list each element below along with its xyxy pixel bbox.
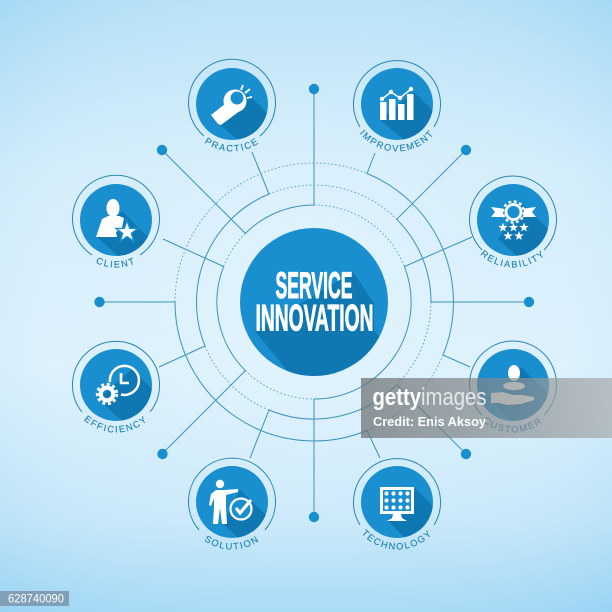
label: CLIENT bbox=[96, 258, 133, 268]
badge: customer bbox=[469, 340, 557, 433]
watermark logo: gettyimages bbox=[372, 384, 486, 411]
label: CUSTOMER bbox=[484, 418, 542, 433]
badge: practice bbox=[188, 58, 276, 152]
label: RELIABILITY bbox=[480, 250, 543, 268]
watermark banner bbox=[361, 378, 612, 438]
badge: solution bbox=[188, 458, 276, 550]
title: INNOVATION bbox=[256, 298, 374, 338]
badge: client bbox=[72, 174, 160, 268]
label: PRACTICE bbox=[204, 138, 258, 152]
icon: gear, ribbon and stars bbox=[491, 202, 536, 240]
badge: technology bbox=[352, 458, 442, 550]
watermark credit: Credit: Enis Aksoy bbox=[373, 415, 486, 429]
label: EFFICIENCY bbox=[84, 415, 146, 432]
image id tag bbox=[0, 591, 69, 606]
right and top-right connector bbox=[397, 150, 529, 302]
connector end dots bbox=[94, 84, 534, 522]
dotted rings bbox=[175, 163, 443, 430]
connector network bbox=[100, 89, 529, 517]
icon: monitor with diagram bbox=[380, 487, 414, 521]
image id tag: 628740090 bbox=[8, 594, 64, 606]
left and technology connector bbox=[100, 302, 380, 458]
label: TECHNOLOGY bbox=[363, 528, 430, 550]
title: SERVICE bbox=[276, 265, 352, 306]
icon: wrench bbox=[211, 85, 252, 125]
label: IMPROVEMENT bbox=[360, 130, 432, 152]
badge: improvement bbox=[352, 60, 442, 152]
icon: bar chart bbox=[380, 87, 414, 120]
badge: reliability bbox=[469, 176, 557, 268]
solution and bottom-right connector bbox=[250, 385, 466, 458]
customer and improvement connector bbox=[367, 153, 470, 367]
badge: efficiency bbox=[72, 340, 160, 432]
icon: presenter with check mark bbox=[209, 480, 252, 524]
icon: person with star bbox=[96, 199, 138, 241]
top and top-left connector bbox=[162, 89, 314, 233]
client and bottom-left connector bbox=[162, 239, 245, 454]
central circle: service innovation bbox=[240, 228, 388, 376]
label: SOLUTION bbox=[204, 536, 258, 550]
practice and efficiency connector bbox=[159, 152, 269, 367]
icon: person over hand bbox=[491, 365, 534, 405]
bottom and reliability connector bbox=[314, 237, 472, 517]
icon: clock and gear bbox=[97, 366, 139, 404]
